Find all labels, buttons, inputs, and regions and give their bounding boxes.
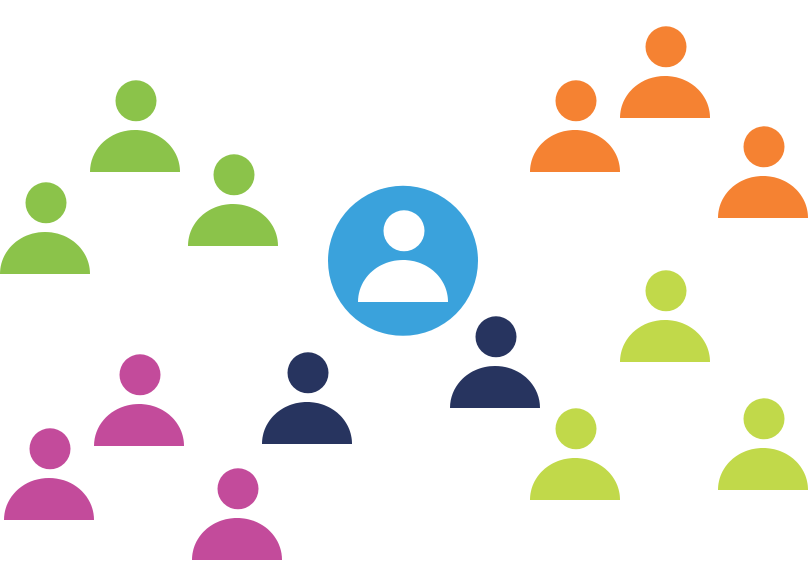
icon: lime person top	[620, 270, 710, 362]
icon: green person left	[0, 182, 90, 274]
icon: lime person bottom	[530, 408, 620, 500]
icon: orange person top	[620, 26, 710, 118]
icon: green person top	[90, 80, 180, 172]
icon: orange person right	[718, 126, 808, 218]
icon: green person right	[188, 154, 278, 246]
icon: orange person left	[530, 80, 620, 172]
icon: central blue person badge	[328, 186, 478, 336]
icon: magenta person top	[94, 354, 184, 446]
icon: navy person right	[450, 316, 540, 408]
icon: magenta person bottom	[192, 468, 282, 560]
icon: navy person left	[262, 352, 352, 444]
icon: magenta person left	[4, 428, 94, 520]
icon: lime person right	[718, 398, 808, 490]
